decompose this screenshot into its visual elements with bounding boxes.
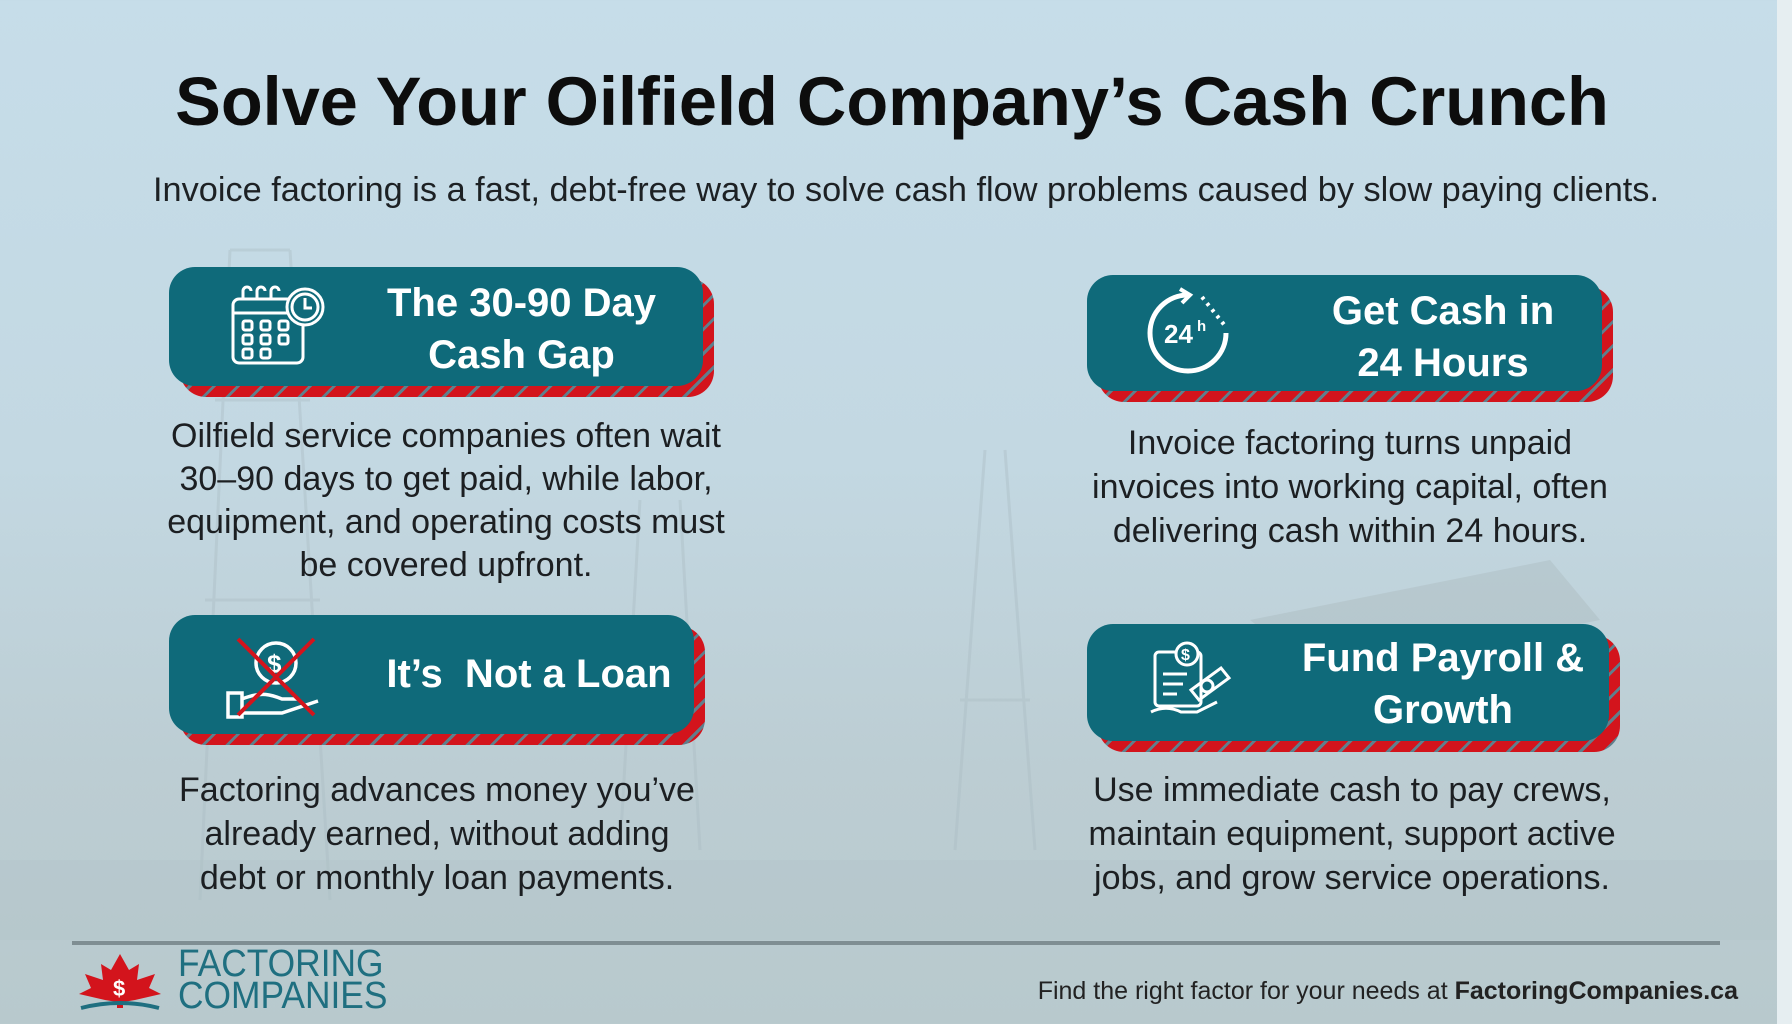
icon: calendar clock [232,286,324,364]
title: Solve Your Oilfield Company’s Cash Crunch [175,63,1609,140]
panel: 30-90 day cash gap banner [169,267,714,397]
icon: invoice and money hand: $ [1181,647,1190,664]
text block: fund payroll: Use immediate cash to pay crews, [1093,771,1611,809]
icon: invoice and money hand [1150,642,1232,714]
icon: hand with crossed dollar [226,638,318,719]
subtitle: Invoice factoring is a fast, debt-free way to solve cash flow problems caused by slow paying clients. [153,171,1659,209]
text block: fund payroll: maintain equipment, support active [1088,815,1616,853]
banner title: Growth [1373,688,1513,732]
text block: not a loan: Factoring advances money you’ve [179,771,695,809]
banner title [1332,289,1554,385]
panel: not a loan banner [169,615,705,745]
text block: fund payroll: jobs, and grow service operations. [1094,859,1610,897]
text block: fund payroll [1088,771,1616,897]
icon: maple leaf: $ [113,976,125,1001]
logo [79,943,387,1017]
banner title: It’s Not a Loan [386,652,672,696]
text block: 24 hours: invoices into working capital, often [1092,468,1608,506]
text block: cash gap: Oilfield service companies often wait [171,417,721,455]
text block: cash gap: equipment, and operating costs must [167,503,725,541]
text block: 24 hours [1092,424,1608,550]
text block: not a loan: debt or monthly loan payments. [200,859,674,897]
icon: maple leaf [79,954,161,1010]
text block: cash gap [167,417,725,584]
icon: 24h [1148,287,1228,374]
logo text: FACTORING [178,943,384,985]
text block: cash gap: be covered upfront. [300,546,592,584]
panel: get cash in 24 hours banner [1087,275,1613,402]
icon: hand with crossed dollar: $ [267,649,282,679]
banner title: Get Cash in [1332,289,1554,333]
text block: cash gap: 30–90 days to get paid, while labor, [179,460,713,498]
text block: not a loan [179,771,695,897]
logo text [178,943,387,1017]
icon: 24h: 24 [1164,319,1193,349]
banner title [387,281,656,377]
text block: 24 hours: delivering cash within 24 hours. [1113,512,1587,550]
text block: not a loan: already earned, without adding [204,815,670,853]
footer divider [72,941,1720,945]
logo text: COMPANIES [178,975,387,1017]
text block: 24 hours: Invoice factoring turns unpaid [1128,424,1572,462]
banner title: The 30-90 Day [387,281,656,325]
banner title: 24 Hours [1357,341,1529,385]
banner title [1302,636,1584,732]
footer text: Find the right factor for your needs at FactoringCompanies.ca [1038,977,1738,1005]
banner title: Cash Gap [428,333,615,377]
banner title: Fund Payroll & [1302,636,1584,680]
icon: 24h: h [1197,318,1206,335]
panel: fund payroll banner [1087,624,1620,752]
